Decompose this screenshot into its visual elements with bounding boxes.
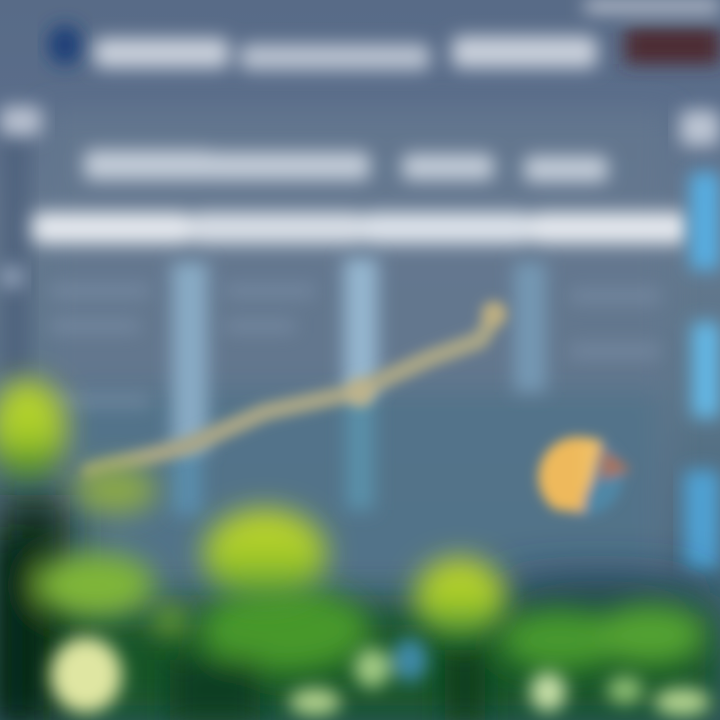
line chart xyxy=(90,301,507,472)
panel: left margin xyxy=(0,130,30,380)
faint table text xyxy=(50,285,660,407)
column highlights xyxy=(172,258,546,515)
right blue tiles xyxy=(684,172,720,570)
foliage: bright lime leaves xyxy=(0,380,506,638)
icon: navy badge xyxy=(48,25,82,65)
heading xyxy=(84,150,608,182)
foliage: leaves xyxy=(0,540,705,720)
panel: top right corner xyxy=(585,0,720,64)
panel: main chart board xyxy=(45,110,670,590)
left edge label xyxy=(0,106,42,136)
right edge label xyxy=(680,110,720,146)
foliage: highlights xyxy=(50,637,710,716)
title xyxy=(94,36,597,70)
left small label xyxy=(0,266,24,288)
pie chart xyxy=(538,437,632,515)
foliage: dark base xyxy=(0,495,720,720)
subtitle band xyxy=(32,212,688,244)
